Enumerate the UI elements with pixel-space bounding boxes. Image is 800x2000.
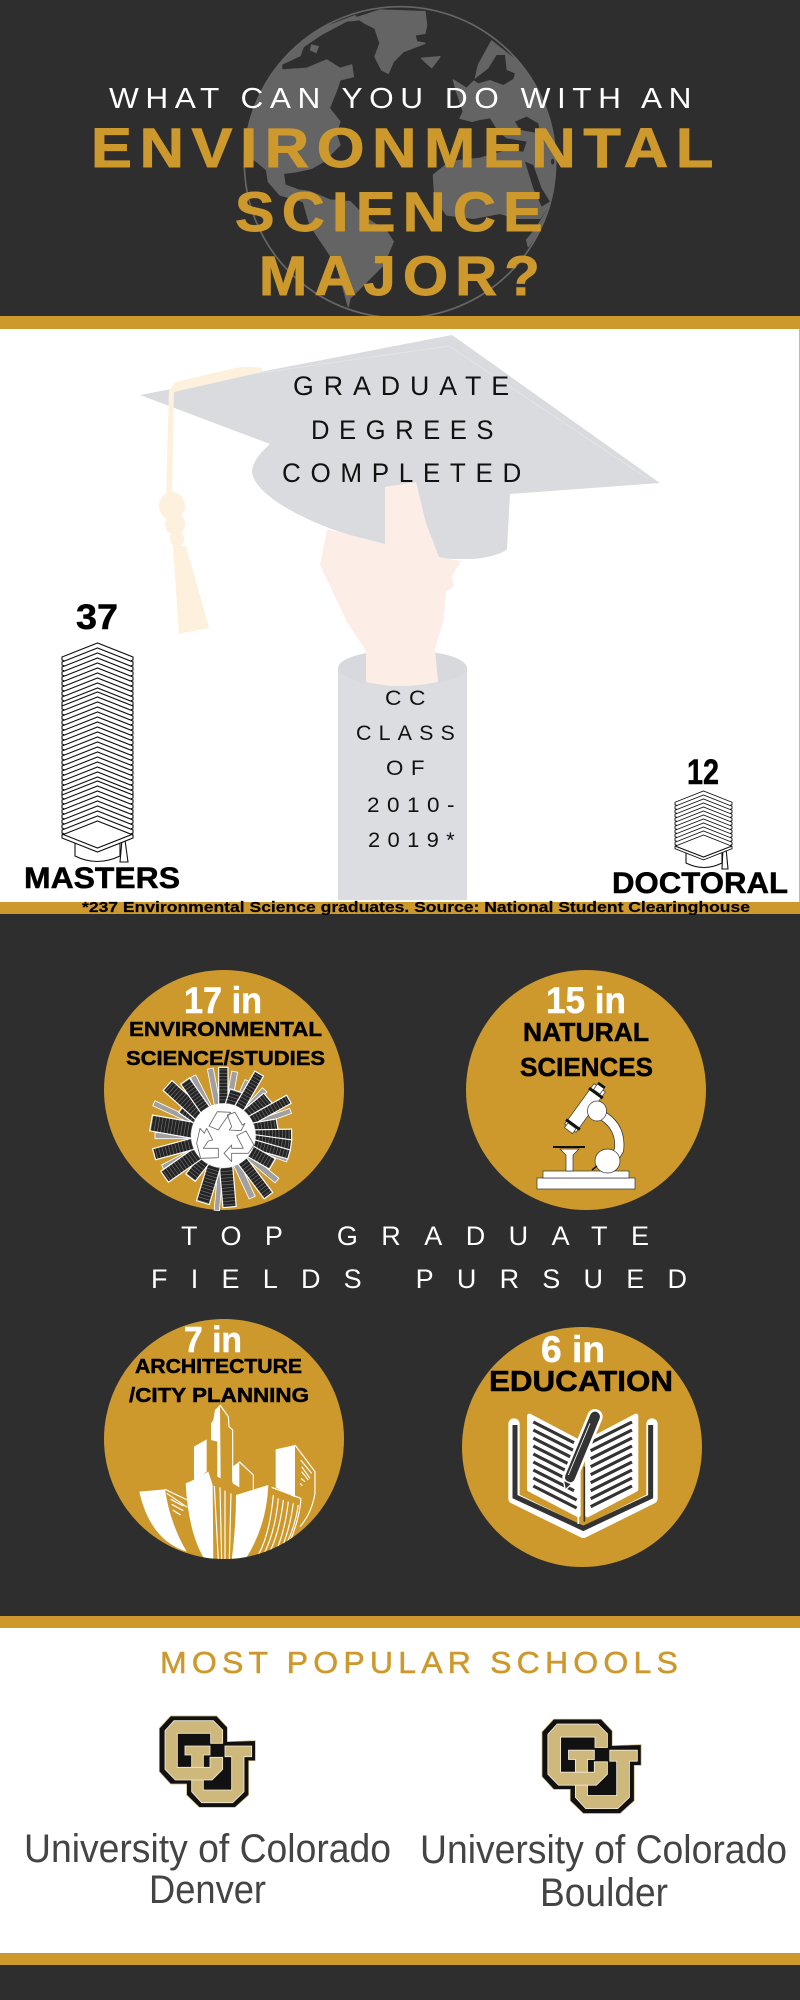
number: 17 in: 17 in: [184, 980, 262, 1021]
logo: cu boulder: [542, 1719, 641, 1813]
panel: top graduate fields: [104, 970, 706, 1567]
text: of: OF: [386, 757, 432, 780]
title: major: MAJOR?: [259, 244, 547, 307]
number: 12: 12: [687, 753, 719, 792]
footnote: source: *237 Environmental Science graduates. Source: National Student Clearinghouse: [82, 899, 750, 916]
heading: degrees: DEGREES: [311, 415, 503, 445]
label: science/studies: SCIENCE/STUDIES: [126, 1047, 325, 1070]
title: environmental: ENVIRONMENTAL: [91, 116, 721, 179]
chart: doctoral stack of 12 caps: [675, 791, 732, 869]
text: university of colorado (denver): University of Colorado: [24, 1827, 391, 1871]
number: 7 in: 7 in: [184, 1319, 242, 1360]
heading: most popular schools: MOST POPULAR SCHOOLS: [160, 1645, 683, 1680]
number: 6 in: 6 in: [541, 1329, 605, 1370]
icon: city skyline: [139, 1405, 315, 1560]
heading: completed: COMPLETED: [282, 458, 531, 488]
panel: graduate degrees: [0, 329, 800, 903]
icon: graduation cap, hand and sleeve: [140, 335, 660, 900]
icon: book and pen: [514, 1416, 652, 1532]
label: /city planning: /CITY PLANNING: [129, 1384, 309, 1407]
text: cc: CC: [385, 687, 433, 710]
circle: education: [462, 1327, 702, 1567]
label: architecture: ARCHITECTURE: [135, 1355, 302, 1378]
label: masters: MASTERS: [24, 862, 180, 895]
heading: what can you do with an: WHAT CAN YOU DO WITH AN: [109, 83, 698, 115]
label: sciences: SCIENCES: [520, 1052, 653, 1082]
heading: fields pursued: FIELDS PURSUED: [151, 1264, 705, 1294]
circle: environmental science: [104, 970, 344, 1211]
text: boulder: Boulder: [540, 1871, 668, 1915]
label: education: EDUCATION: [489, 1366, 673, 1398]
icon: microscope: [537, 1080, 635, 1189]
title: science: SCIENCE: [235, 180, 550, 243]
panel: top gold band: [0, 316, 800, 329]
circle: architecture: [104, 1319, 344, 1560]
panel: middle gold band: [0, 902, 800, 914]
heading: graduate: GRADUATE: [293, 371, 519, 401]
label: natural: NATURAL: [523, 1017, 649, 1047]
number: 15 in: 15 in: [546, 980, 626, 1021]
text: 2019*: 2019*: [368, 829, 462, 852]
circle: natural sciences: [466, 970, 706, 1210]
icon: globe: [243, 7, 557, 318]
label: environmental: ENVIRONMENTAL: [129, 1018, 322, 1041]
panel: most popular schools: [0, 1616, 800, 1965]
label: doctoral: DOCTORAL: [612, 867, 788, 900]
chart: masters stack of 37 caps: [62, 643, 133, 862]
heading: top graduate: TOP GRADUATE: [181, 1221, 667, 1251]
panel: header: [91, 7, 721, 318]
text: 2010-: 2010-: [367, 794, 462, 817]
icon: recycling globe with city skyline: [150, 1067, 292, 1211]
text: denver: Denver: [149, 1868, 266, 1912]
logo: cu denver: [159, 1716, 255, 1807]
number: 37: 37: [76, 598, 118, 637]
text: class: CLASS: [356, 722, 462, 745]
